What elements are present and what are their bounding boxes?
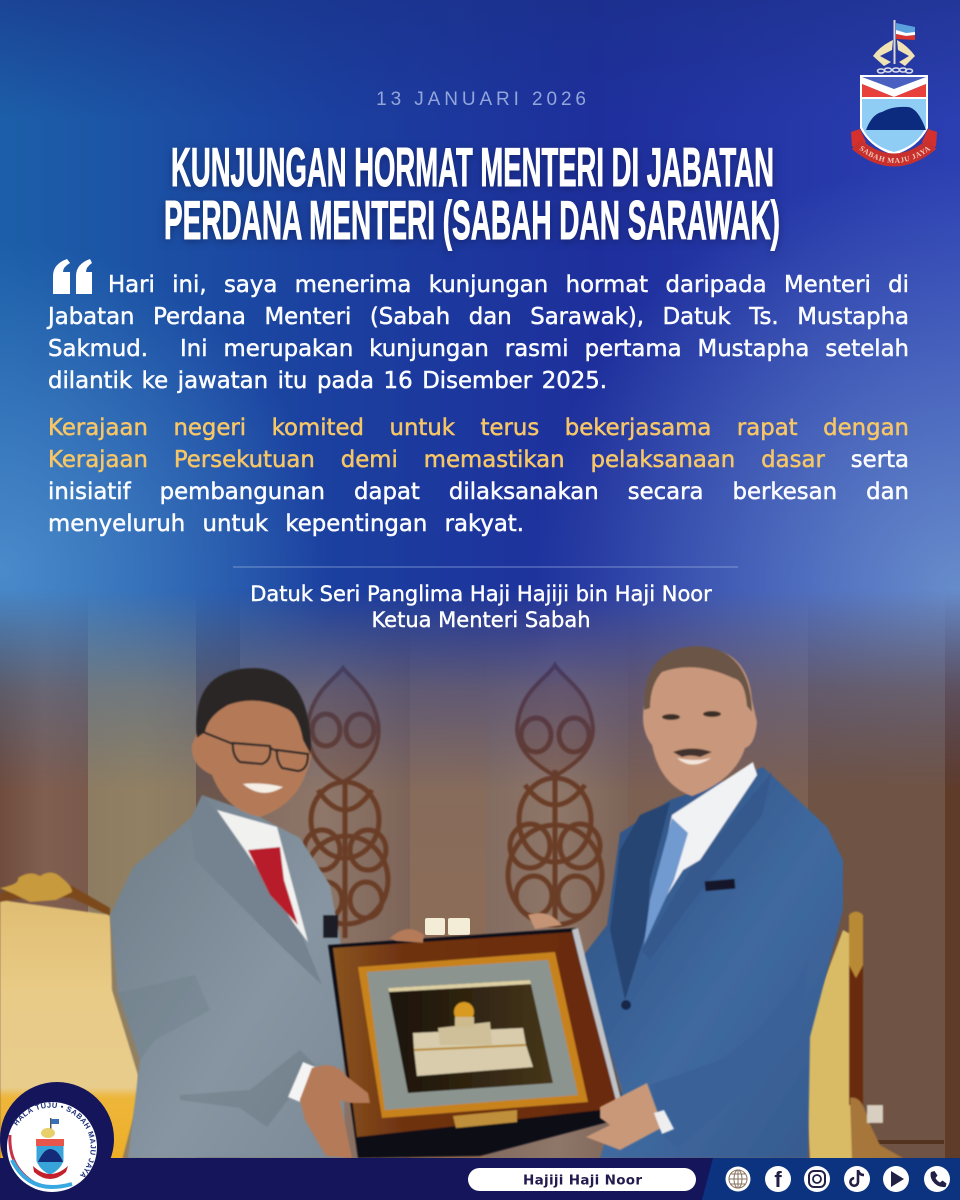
tie left [248,847,298,925]
paragraph two: inisiatif pembangunan dapat dilaksanakan secara berkesan dan [48,479,909,505]
hands [300,913,674,1158]
man right [580,646,843,1158]
icon: facebook [765,1166,791,1192]
shirt right [648,762,757,925]
wooden wall [0,560,960,1160]
signature: Datuk Seri Panglima Haji Hajiji bin Haji Noor [250,582,712,606]
icon: instagram [804,1166,830,1192]
pill label [468,1168,696,1191]
paragraph two: Kerajaan negeri komited untuk terus bekerjasama rapat dengan [48,415,909,441]
footer icons [726,1166,950,1192]
ornament left [304,668,388,938]
icon: facebook: f [774,1167,782,1192]
glasses [203,732,308,771]
paragraph one [46,272,909,394]
footer band [0,1158,960,1200]
plaque [328,928,627,1158]
right chair [803,912,903,1160]
date: 13 JANUARI 2026 [376,89,590,110]
round badge [0,1082,114,1192]
paragraph two: Kerajaan Persekutuan demi memastikan pelaksanaan dasar serta [48,447,909,473]
icon: phone [924,1166,950,1192]
icon: globe [726,1166,750,1192]
icon: youtube play [883,1166,909,1192]
suit right [580,767,843,1158]
tie right [644,818,688,945]
sleeve fold [650,960,808,1148]
suit left [110,795,345,1158]
left cuff and hand [288,1062,315,1102]
head right [643,647,757,796]
badge emblem [33,1118,68,1179]
ornament right [508,665,602,925]
crest scroll [851,129,937,166]
badge ring text: HALA TUJU • SABAH MAJU JAYA [13,1102,96,1178]
pill label: Hajiji Haji Noor [523,1172,642,1188]
paragraph one: Jabatan Perdana Menteri (Sabah dan Sarawak), Datuk Ts. Mustapha [48,304,909,330]
bright candle [425,918,470,935]
title [164,136,780,251]
crest wreath [878,68,912,73]
left chair [0,872,138,1160]
crest flag [894,20,915,64]
signature: Ketua Menteri Sabah [371,608,591,632]
paragraph one: dilantik ke jawatan itu pada 16 Disember 2025. [48,368,607,394]
shirt left [217,810,308,942]
building [413,1002,533,1076]
paragraph two [48,415,909,537]
paragraph two: menyeluruh untuk kepentingan rakyat. [48,511,524,537]
crest shield [860,75,928,155]
icon: quotation mark [53,259,92,294]
icon: tiktok [844,1166,870,1192]
crest top right [851,20,937,166]
paragraph one: Sakmud. Ini merupakan kunjungan rasmi pertama Mustapha setelah [48,336,909,362]
head left [192,668,311,817]
divider [233,566,738,568]
crest scroll: SABAH MAJU JAYA [860,146,930,164]
signature [250,582,712,632]
paragraph one: Hari ini, saya menerima kunjungan hormat daripada Menteri di [108,272,909,298]
man left [110,668,345,1158]
crest arms [873,40,915,66]
